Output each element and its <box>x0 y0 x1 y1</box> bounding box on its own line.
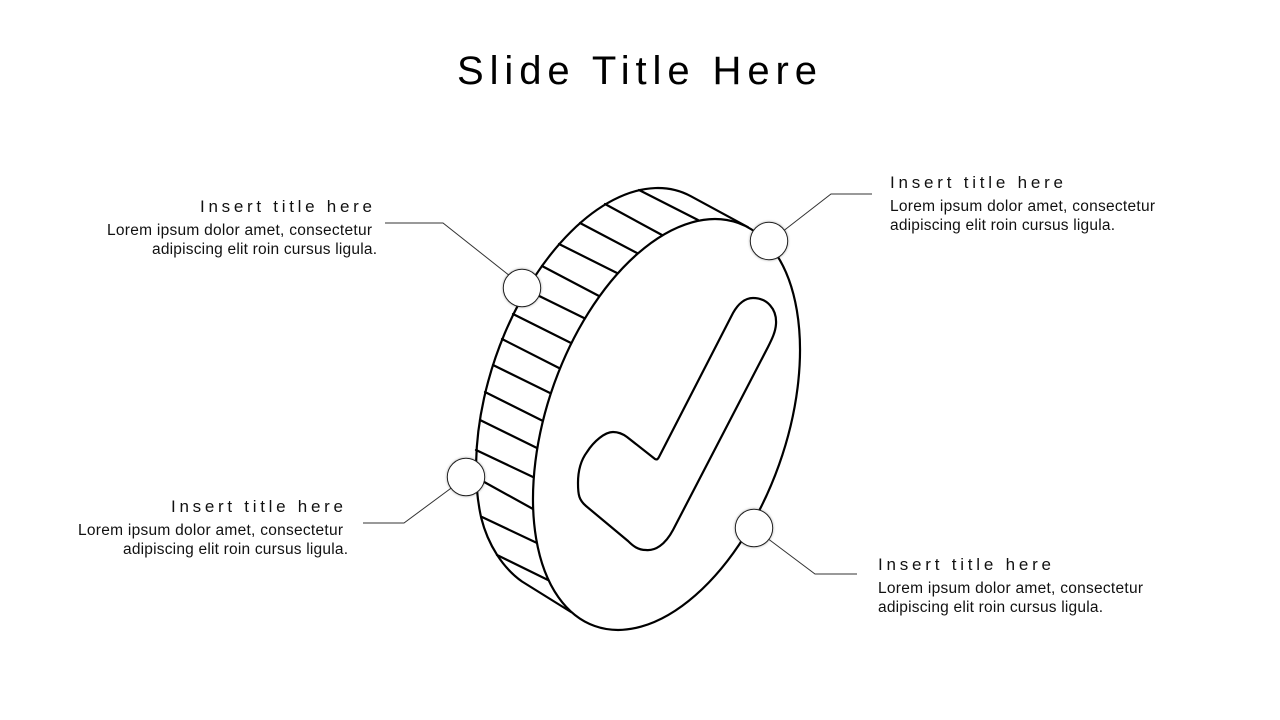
checkmark <box>578 298 776 550</box>
text block: top left: Insert title here <box>200 197 372 216</box>
text block: bottom right: Lorem ipsum dolor amet, consectetur <box>878 580 1143 597</box>
connector: top left <box>385 223 510 276</box>
text block: top right: Insert title here <box>890 173 1063 192</box>
text block: bottom right: Insert title here <box>878 555 1051 574</box>
text block: bottom left: Lorem ipsum dolor amet, consectetur <box>78 522 343 539</box>
text block: bottom right <box>878 555 1143 616</box>
text block: bottom left <box>78 497 348 558</box>
marker: bottom left <box>447 458 485 496</box>
text block: bottom left: Insert title here <box>171 497 343 516</box>
text block: top right: Lorem ipsum dolor amet, consectetur <box>890 198 1155 215</box>
text block: top right <box>890 173 1155 234</box>
marker: top right <box>750 222 788 260</box>
connector: bottom left <box>363 486 454 523</box>
coin icon with checkmark <box>476 183 851 666</box>
marker: top left <box>503 269 541 307</box>
coin side band <box>476 188 748 612</box>
text block: bottom right: adipiscing elit roin cursus ligula. <box>878 599 1103 616</box>
text block: top left <box>107 197 377 258</box>
text block: bottom left: adipiscing elit roin cursus ligula. <box>123 541 348 558</box>
title: Slide Title Here <box>457 49 817 93</box>
connector: bottom right <box>767 538 857 574</box>
marker: bottom right <box>735 509 773 547</box>
text block: top left: adipiscing elit roin cursus ligula. <box>152 241 377 258</box>
coin front face <box>482 183 851 666</box>
text block: top left: Lorem ipsum dolor amet, consectetur <box>107 222 372 239</box>
connector: top right <box>782 194 872 232</box>
text block: top right: adipiscing elit roin cursus ligula. <box>890 217 1115 234</box>
